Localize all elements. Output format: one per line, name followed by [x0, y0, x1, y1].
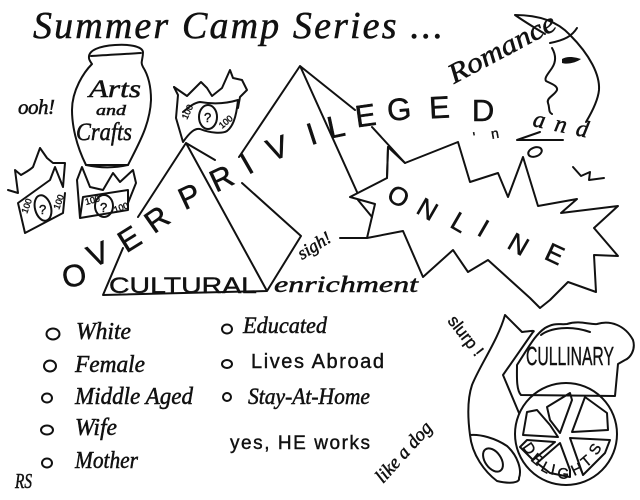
list: right column: Educated [242, 313, 327, 338]
exclamation: ooh: ooh! [18, 95, 55, 119]
label: online letters: O [382, 178, 415, 214]
list: right column [222, 313, 384, 409]
label: overprivileged letters: V [262, 128, 293, 168]
icon: burning bill, bottom: ? [100, 200, 107, 215]
label: overprivileged letters: E [353, 97, 378, 134]
label: overprivileged letters: I [302, 116, 321, 152]
list: right column: Lives Abroad [251, 351, 384, 373]
icon: burning bill, left [8, 148, 66, 233]
icon: burning bill, left: ? [39, 202, 46, 217]
icon: orange slice wheel: H [569, 460, 586, 480]
label: overprivileged letters: G [386, 91, 413, 128]
list: left column: Female [74, 352, 145, 378]
label: online letters: N [412, 192, 443, 227]
label: overprivileged letters: R [138, 199, 176, 240]
remark: like a dog: like a dog [371, 418, 437, 487]
icon: crescent moon [515, 15, 599, 122]
list: left column [41, 319, 194, 474]
label: online letters: E [541, 237, 569, 271]
label: overprivileged letters: O [59, 256, 89, 295]
icon: burning bill, top: 100 [217, 113, 235, 131]
pyramid: cultural [103, 143, 301, 295]
icon: orange slice wheel [515, 383, 617, 485]
list: left column: White [76, 319, 131, 345]
label: romance: Romance [442, 7, 561, 91]
label: overprivileged letters: E [428, 89, 451, 126]
label: overprivileged letters: E [111, 219, 147, 259]
burst: online [340, 142, 618, 308]
label: overprivileged letters: D [472, 93, 494, 128]
label: overprivileged letters: V [82, 234, 115, 274]
list: left column: Wife [75, 415, 117, 441]
icon: tongue [468, 315, 534, 483]
label: in now scattered letters [472, 125, 604, 180]
label: online letters: N [503, 227, 534, 262]
icon: burning bill, bottom: 100 [84, 193, 101, 207]
icon: orange slice wheel: G [557, 465, 570, 483]
icon: orange slice wheel: E [527, 450, 546, 470]
icon: burning bill, bottom [77, 167, 136, 218]
icon: burning bill, top: 100 [180, 103, 195, 121]
list: left column: Middle Aged [74, 384, 194, 410]
list: right column: Stay-At-Home [248, 384, 370, 409]
icon: orange slice wheel: I [549, 461, 557, 479]
label: overprivileged letters: P [173, 176, 206, 217]
remark: yes, he works: yes, HE works [230, 433, 370, 454]
list: left column: Mother [74, 448, 139, 474]
label: cultural: CULTURAL [109, 273, 257, 298]
label: online letters: I [473, 213, 494, 243]
icon: burning bill, top [174, 70, 247, 142]
icon: arts and crafts jar: Arts [87, 76, 141, 103]
icon: burning bill, top: ? [204, 110, 211, 125]
pyramid: privileged [239, 66, 405, 192]
exclamation: slurp: slurp ! [444, 312, 487, 360]
title: Summer Camp Series ... [33, 5, 443, 47]
exclamation: sigh: sigh! [294, 227, 335, 263]
label: and: and [531, 106, 592, 144]
label: enrichment: enrichment [274, 272, 419, 297]
icon: burning bill, bottom: 100 [112, 200, 130, 215]
icon: burning bill, left: 100 [19, 197, 34, 215]
label: overprivileged letters: I [234, 147, 259, 181]
icon: bread slice [517, 322, 634, 396]
signature: RS [14, 469, 32, 493]
label: online letters: L [446, 206, 473, 239]
icon: burning bill, left: 100 [51, 193, 66, 211]
icon: orange slice wheel: D [519, 440, 539, 458]
label: overprivileged letters: L [324, 108, 348, 146]
label: overprivileged letters [59, 89, 494, 295]
icon: arts and crafts jar [72, 45, 151, 167]
label: in now scattered letters: 'n [472, 125, 500, 145]
icon: orange slice wheel: L [538, 459, 553, 477]
icon: arts and crafts jar: and [96, 103, 127, 119]
icon: orange slice wheel: S [586, 441, 605, 458]
label: overprivileged letters: R [204, 158, 239, 199]
icon: orange slice wheel: T [578, 452, 596, 471]
label: online letters [382, 178, 569, 271]
icon: arts and crafts jar: Crafts [76, 119, 132, 146]
